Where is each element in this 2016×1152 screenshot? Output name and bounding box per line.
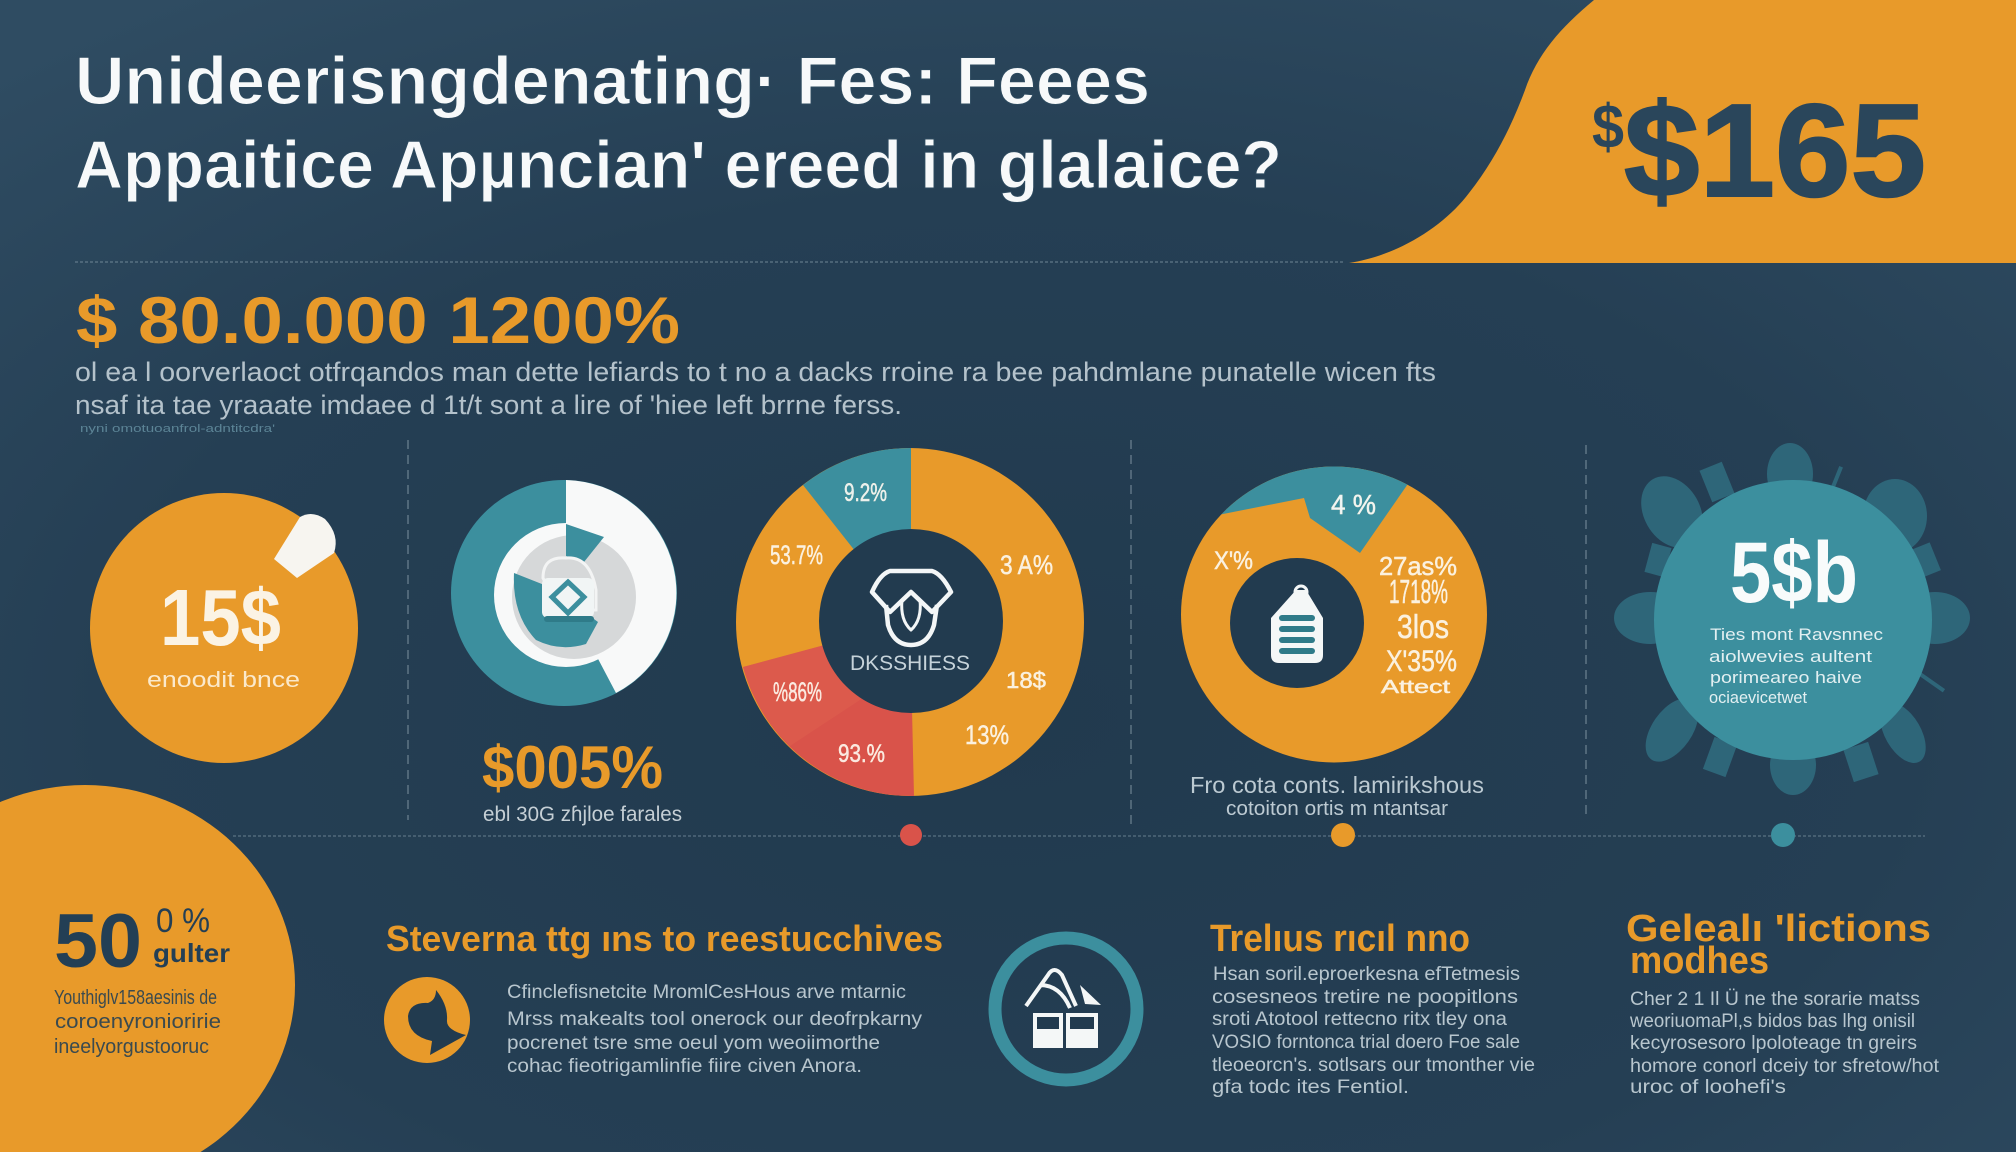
icon: camera badge — [542, 558, 596, 622]
pie labels: 3los — [1397, 608, 1449, 645]
section: details: Trelıus rıcıl nno — [1210, 918, 1470, 960]
pie labels: X'35% — [1386, 645, 1457, 678]
panel: bottom left orange stat: 0 % — [156, 902, 210, 940]
section: general: uroc of loohefi's — [1630, 1076, 1786, 1098]
chart: teal and white donut — [451, 480, 677, 706]
section: details: VOSIO forntonca trial doero Foe sale — [1212, 1031, 1520, 1053]
icon: price tag — [1271, 586, 1323, 663]
timeline marker: red — [900, 824, 922, 846]
section: strategies: Cfinclefisnetcite MromlCesHous arve mtarnic — [507, 981, 906, 1003]
donut labels: 53.7% — [770, 540, 823, 570]
section: details: tleoeorcn's. sotlsars our tmonther vie — [1212, 1054, 1535, 1076]
intro text block — [75, 357, 1436, 435]
section: strategies: pocrenet tsre sme oeul yom weoiimorthe — [507, 1032, 880, 1054]
pie labels: Attect — [1381, 677, 1450, 697]
pie caption: Fro cota conts. lamirikshous — [1190, 772, 1484, 798]
panel: bottom left orange stat: Youthiglv158aesinis de — [54, 987, 217, 1009]
section: general: weoriuomaPl,s bidos bas lhg onisil — [1629, 1010, 1915, 1032]
icon: graduation cap outline — [872, 571, 951, 645]
section: details: Hsan soril.eproerkesna efTetmesis — [1213, 963, 1520, 985]
stat: percentage under donut: ebl 30G zɦjloe farales — [483, 803, 682, 826]
section: general: kecyrosesoro lpoloteage tn greirs — [1630, 1032, 1917, 1054]
panel: bottom left orange stat — [0, 785, 295, 1152]
timeline marker: orange — [1331, 823, 1355, 847]
intro text block: nsaf ita tae yraaate imdaee d 1t/t sont a lire of 'hiee left brrne ferss. — [75, 390, 902, 420]
pie labels — [1214, 489, 1457, 697]
panel: top right price banner: $165 — [1624, 77, 1926, 224]
panel: orange stat circle: 15$ — [160, 573, 281, 662]
donut labels: %86% — [773, 677, 822, 707]
chart: orange pie with tag — [1181, 440, 1487, 762]
pie caption — [1190, 772, 1484, 820]
title: Appaitice Apµncian' ereed in glalaice? — [75, 127, 1282, 203]
panel: top right price banner: $ — [1592, 93, 1624, 162]
title: Unideerisngdenating· Fes: Feees — [75, 43, 1150, 119]
section: strategies: Mrss makealts tool onerock our deofrpkarny — [507, 1008, 922, 1030]
section: general — [1626, 908, 1940, 1098]
donut labels: 18$ — [1006, 667, 1046, 693]
panel: bottom left orange stat: gulter — [153, 938, 230, 968]
section: general: Gelealı 'lictions — [1626, 908, 1931, 950]
donut labels: 13% — [965, 720, 1009, 750]
section: details — [1210, 918, 1535, 1098]
panel: teal stat circle with petals: ociaevicetwet — [1709, 688, 1807, 707]
section: details: sroti Atotool rettecno ritx tley ona — [1212, 1008, 1507, 1030]
pie labels: 4 % — [1331, 489, 1376, 520]
intro text block: ol ea l oorverlaoct otfrqandos man dette lefiards to t no a dacks rroine ra bee pahdmlane punatelle wicen fts — [75, 357, 1436, 387]
section: strategies: cohac fieotrigamlinfie fiire civen Anora. — [507, 1055, 862, 1077]
chart: main donut — [736, 448, 1084, 796]
section: details: gfa todc ites Fentiol. — [1212, 1076, 1409, 1098]
panel: orange stat circle — [90, 493, 358, 763]
pie caption: cotoiton ortis m ntantsar — [1226, 798, 1448, 820]
section: strategies: Steverna ttg ıns to reestucchives — [386, 918, 943, 959]
panel: teal stat circle with petals: porimeareo haive — [1710, 668, 1862, 687]
pie labels: 1718% — [1389, 573, 1448, 610]
stat: percentage under donut — [482, 734, 682, 826]
panel: bottom left orange stat: ineelyorgustooruc — [54, 1036, 209, 1058]
chart: main donut: DKSSHIESS — [850, 652, 970, 675]
section: general: homore conorl dceiy tor sfretow/hot — [1630, 1055, 1940, 1077]
section: general: Cher 2 1 Il Ü ne the sorarie matss — [1630, 988, 1920, 1010]
section: strategies — [384, 918, 943, 1077]
panel: teal stat circle with petals — [1614, 443, 1970, 795]
timeline marker: teal — [1771, 823, 1795, 847]
section: general: modhes — [1630, 940, 1769, 982]
panel: bottom left orange stat: coroenyronioririe — [55, 1011, 221, 1033]
pie labels: X'% — [1214, 547, 1253, 575]
donut labels: 9.2% — [844, 479, 887, 507]
panel: teal stat circle with petals: aiolwevies aultent — [1709, 647, 1872, 666]
panel: orange stat circle: enoodit bnce — [147, 667, 300, 692]
section: details: cosesneos tretire ne poopitlons — [1212, 986, 1518, 1008]
donut labels — [770, 479, 1053, 768]
panel: bottom left orange stat: 50 — [54, 899, 142, 984]
stat: percentage under donut: $005% — [482, 734, 663, 801]
icon: white tag — [274, 514, 336, 578]
icon: house in teal ring — [995, 938, 1137, 1080]
icon: rabbit badge — [384, 977, 470, 1063]
donut labels: 93.% — [838, 740, 885, 768]
pie labels: 27as% — [1379, 551, 1457, 581]
panel: teal stat circle with petals: Ties mont Ravsnnec — [1710, 625, 1884, 644]
donut labels: 3 A% — [1000, 550, 1053, 580]
panel: top right price banner — [1349, 0, 2016, 263]
panel: teal stat circle with petals: 5$b — [1730, 525, 1858, 621]
headline statistic: $ 80.0.000 1200% — [76, 283, 680, 357]
intro text block: nyni omotuoanfrol-adntitcdra' — [80, 423, 275, 435]
title — [75, 43, 1282, 203]
